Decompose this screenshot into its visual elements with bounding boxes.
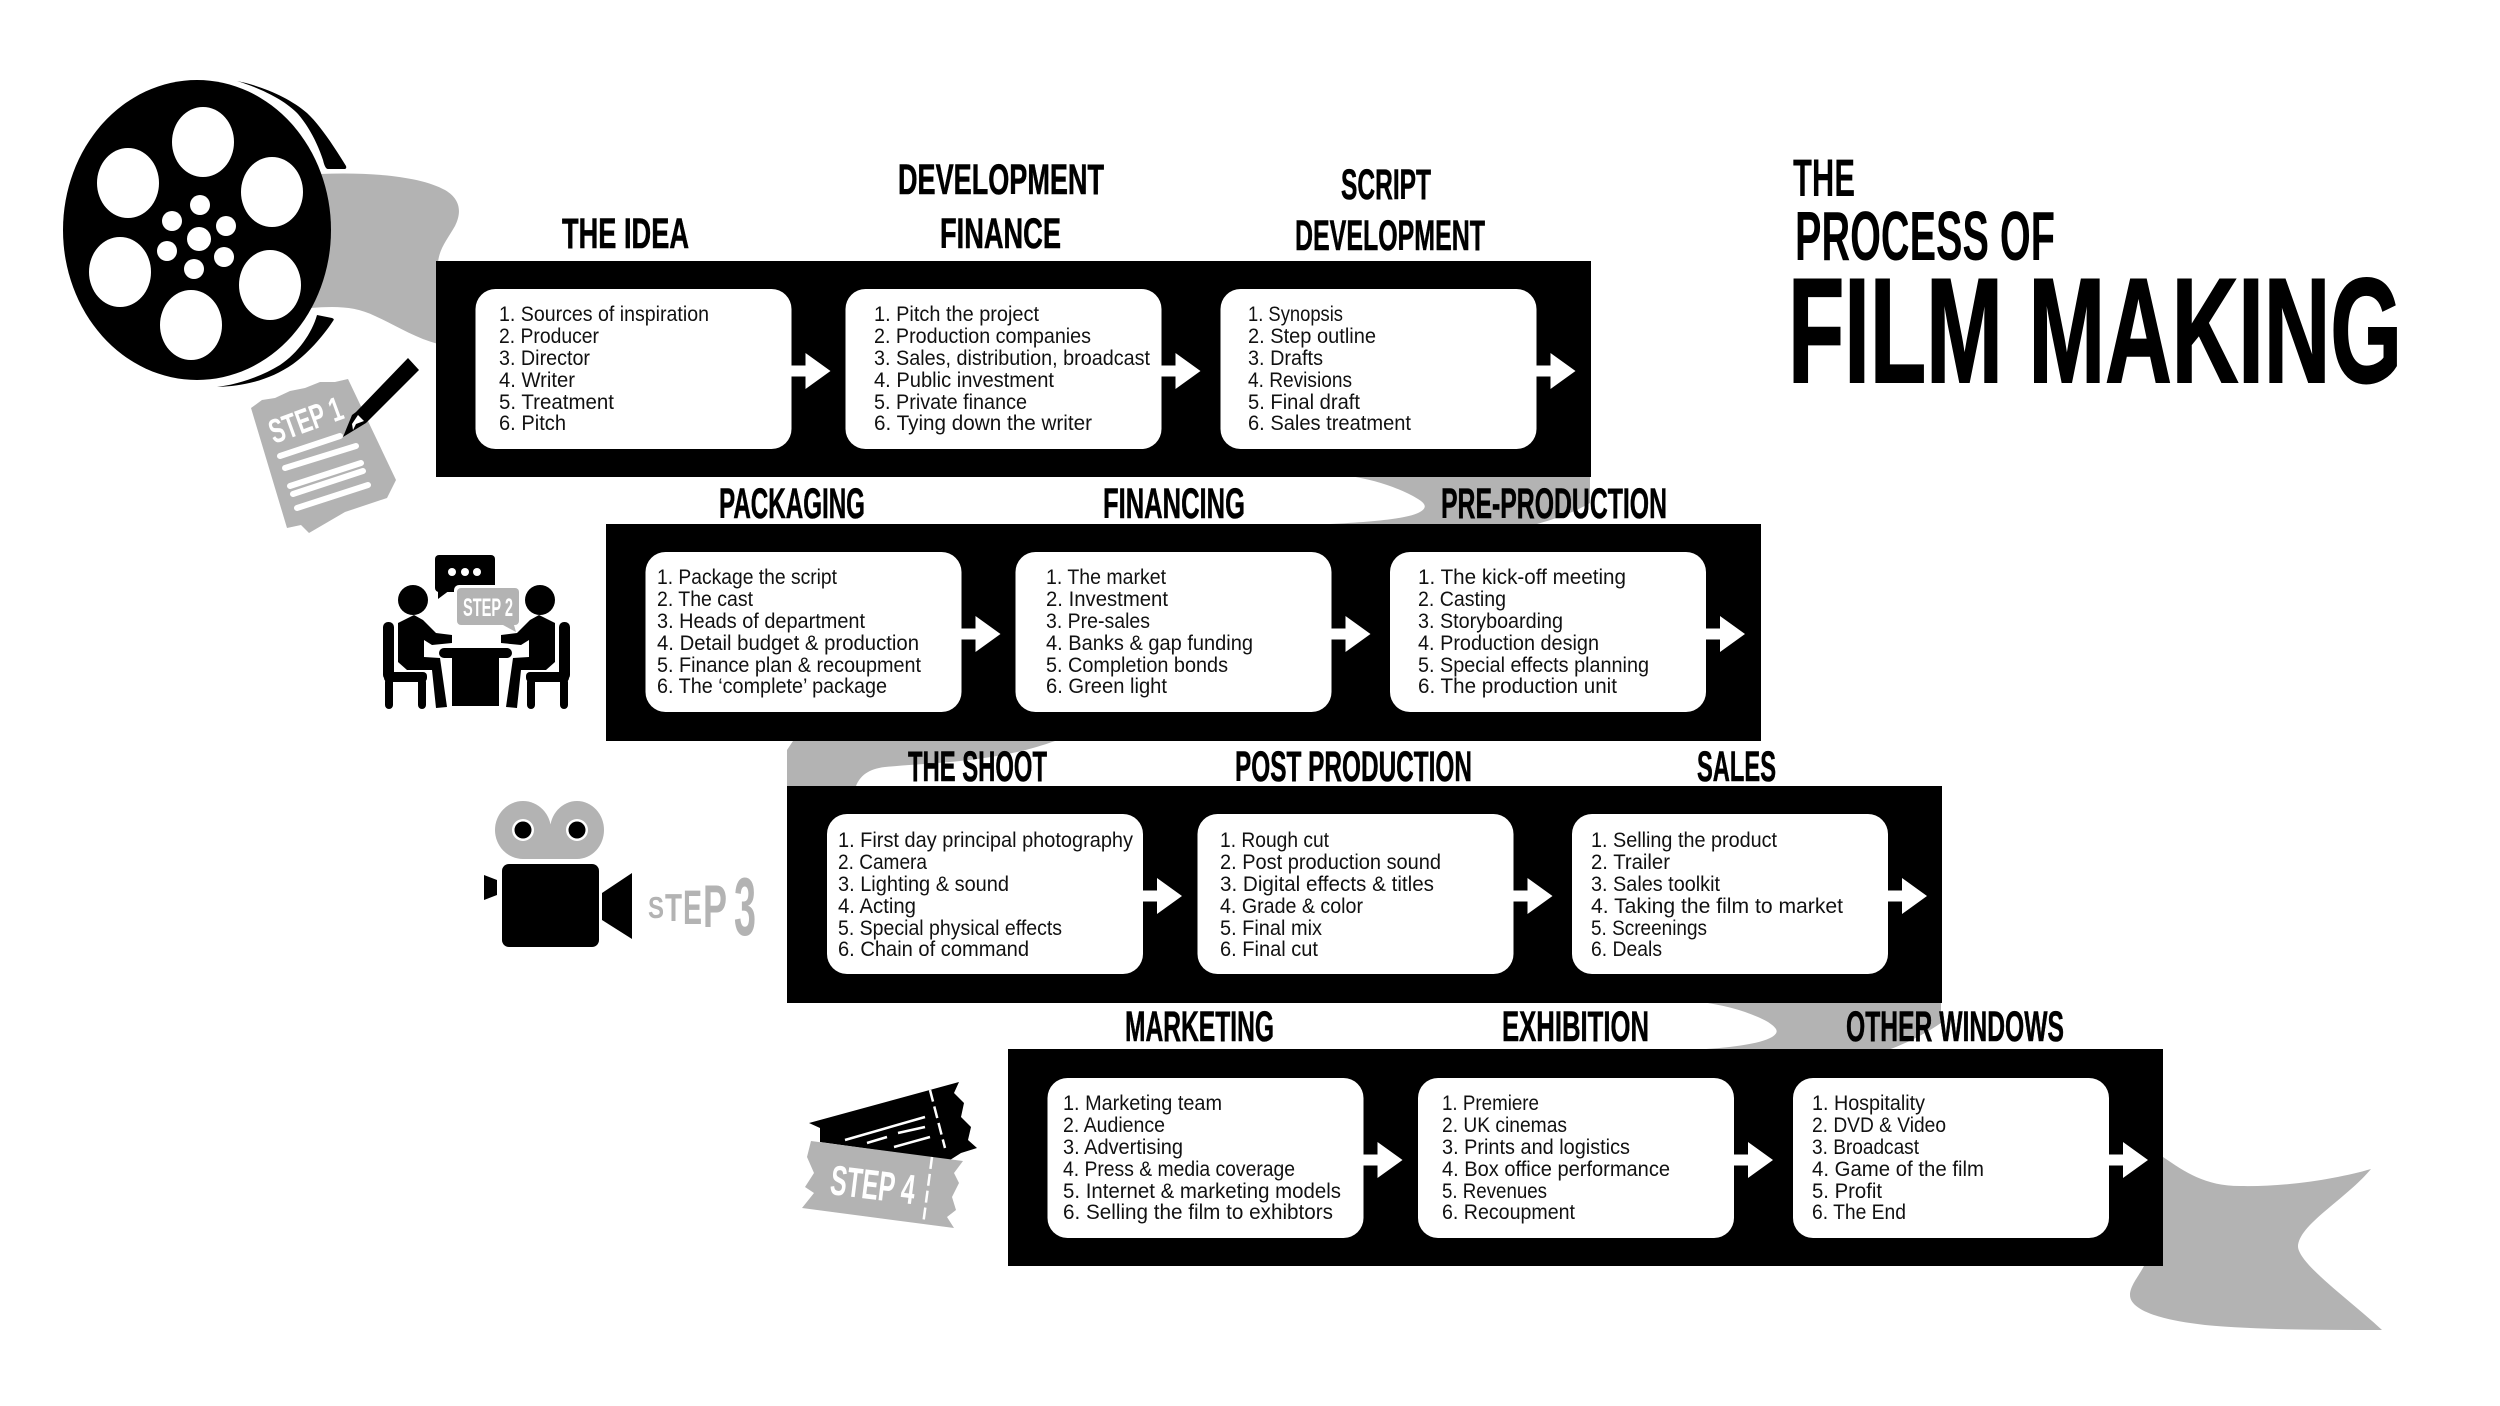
card: the idea list: 4. Writer bbox=[499, 369, 575, 392]
card: marketing list bbox=[1048, 1078, 1364, 1238]
card: other windows list: 4. Game of the film bbox=[1812, 1158, 1984, 1181]
step 3 label: E bbox=[683, 882, 702, 935]
arrow bbox=[962, 616, 1000, 652]
card: post production list: 5. Final mix bbox=[1220, 917, 1322, 940]
card: script development list: 1. Synopsis bbox=[1248, 303, 1343, 326]
card: sales list: 5. Screenings bbox=[1591, 917, 1707, 940]
heading: pre-production: PRE-PRODUCTION bbox=[1441, 480, 1667, 528]
heading: the idea: THE IDEA bbox=[562, 210, 689, 258]
icon: step 4 tickets bbox=[802, 1082, 977, 1228]
arrow bbox=[1364, 1142, 1402, 1178]
heading: script development bbox=[1295, 161, 1485, 260]
heading: exhibition: EXHIBITION bbox=[1502, 1003, 1649, 1051]
card: sales list: 6. Deals bbox=[1591, 938, 1662, 961]
card: other windows list bbox=[1793, 1078, 2109, 1238]
card: sales list: 4. Taking the film to market bbox=[1591, 895, 1843, 918]
card: the shoot list: 5. Special physical effects bbox=[838, 917, 1062, 940]
panel: step 1 row bbox=[436, 156, 1591, 477]
card: other windows list: 1. Hospitality bbox=[1812, 1092, 1925, 1115]
card: exhibition list: 3. Prints and logistics bbox=[1442, 1136, 1630, 1159]
card: sales list: 2. Trailer bbox=[1591, 851, 1670, 874]
arrow bbox=[1888, 878, 1927, 914]
card: development finance list: 1. Pitch the project bbox=[874, 303, 1039, 326]
heading: script development: DEVELOPMENT bbox=[1295, 212, 1485, 260]
card: script development list bbox=[1220, 289, 1536, 449]
heading: packaging: PACKAGING bbox=[719, 480, 865, 528]
title bbox=[1788, 149, 2402, 414]
card: exhibition list: 1. Premiere bbox=[1442, 1092, 1539, 1115]
card: packaging list: 1. Package the script bbox=[657, 566, 837, 589]
card: post production list bbox=[1198, 814, 1514, 974]
card: pre-production list: 2. Casting bbox=[1418, 588, 1506, 611]
card: exhibition list bbox=[1418, 1078, 1734, 1238]
card: other windows list: 2. DVD & Video bbox=[1812, 1114, 1946, 1137]
title: PROCESS OF bbox=[1795, 197, 2055, 275]
arrow bbox=[1162, 353, 1200, 389]
card: other windows list: 6. The End bbox=[1812, 1201, 1906, 1224]
card: pre-production list bbox=[1390, 552, 1706, 712]
card: the idea list: 6. Pitch bbox=[499, 412, 566, 435]
card: financing list: 3. Pre-sales bbox=[1046, 610, 1150, 633]
card: pre-production list: 3. Storyboarding bbox=[1418, 610, 1563, 633]
card: the idea list: 2. Producer bbox=[499, 325, 599, 348]
arrow bbox=[1514, 878, 1552, 914]
step 3 label: S bbox=[648, 890, 664, 925]
card: pre-production list: 1. The kick-off meeting bbox=[1418, 566, 1626, 589]
step 3 label: T bbox=[665, 887, 682, 930]
title: THE bbox=[1793, 149, 1855, 208]
film ribbon: ending tail bbox=[2130, 1155, 2382, 1330]
card: development finance list: 6. Tying down the writer bbox=[874, 412, 1092, 435]
card: marketing list: 3. Advertising bbox=[1063, 1136, 1183, 1159]
icon: step 1 script and pencil bbox=[251, 358, 419, 533]
card: script development list: 3. Drafts bbox=[1248, 347, 1323, 370]
card: the shoot list: 4. Acting bbox=[838, 895, 916, 918]
icon: step 1 script and pencil: STEP 1 bbox=[264, 390, 348, 452]
card: pre-production list: 6. The production unit bbox=[1418, 675, 1617, 698]
card: marketing list: 6. Selling the film to exhibtors bbox=[1063, 1201, 1333, 1224]
card: financing list: 6. Green light bbox=[1046, 675, 1167, 698]
arrow bbox=[1143, 878, 1182, 914]
card: packaging list: 6. The ‘complete’ package bbox=[657, 675, 887, 698]
step 3 label: P bbox=[703, 873, 727, 940]
card: other windows list: 5. Profit bbox=[1812, 1180, 1882, 1203]
card: pre-production list: 4. Production design bbox=[1418, 632, 1599, 655]
heading: financing: FINANCING bbox=[1103, 480, 1245, 528]
heading: sales: SALES bbox=[1697, 743, 1776, 791]
card: development finance list: 3. Sales, distribution, broadcast bbox=[874, 347, 1150, 370]
card: post production list: 3. Digital effects & titles bbox=[1220, 873, 1434, 896]
film ribbon: step 2 to step 3 bbox=[787, 741, 1055, 786]
arrow bbox=[792, 353, 830, 389]
card: exhibition list: 6. Recoupment bbox=[1442, 1201, 1575, 1224]
card: development finance list: 2. Production companies bbox=[874, 325, 1091, 348]
card: the idea list: 5. Treatment bbox=[499, 391, 614, 414]
card: script development list: 5. Final draft bbox=[1248, 391, 1360, 414]
heading: development finance bbox=[898, 156, 1104, 258]
film ribbon: step 1 to step 2 bbox=[1330, 476, 1590, 524]
heading: the shoot: THE SHOOT bbox=[908, 743, 1047, 791]
heading: post production: POST PRODUCTION bbox=[1235, 743, 1472, 791]
card: development finance list bbox=[846, 289, 1162, 449]
card: marketing list: 5. Internet & marketing models bbox=[1063, 1180, 1341, 1203]
card: script development list: 4. Revisions bbox=[1248, 369, 1352, 392]
card: sales list: 3. Sales toolkit bbox=[1591, 873, 1720, 896]
arrow bbox=[1706, 616, 1745, 652]
card: the idea list: 1. Sources of inspiration bbox=[499, 303, 709, 326]
card: the shoot list: 2. Camera bbox=[838, 851, 927, 874]
arrow bbox=[1734, 1142, 1773, 1178]
card: pre-production list: 5. Special effects planning bbox=[1418, 654, 1649, 677]
card: the idea list bbox=[476, 289, 792, 449]
card: development finance list: 4. Public investment bbox=[874, 369, 1054, 392]
card: the idea list: 3. Director bbox=[499, 347, 590, 370]
icon: film reel bbox=[63, 80, 346, 387]
film ribbon: step 3 to step 4 bbox=[1690, 1002, 1941, 1050]
film ribbon: reel to step 1 bbox=[310, 174, 459, 344]
card: financing list: 2. Investment bbox=[1046, 588, 1168, 611]
card: packaging list: 5. Finance plan & recoupment bbox=[657, 654, 921, 677]
card: packaging list: 3. Heads of department bbox=[657, 610, 865, 633]
step 3 label bbox=[648, 860, 756, 953]
heading: script development: SCRIPT bbox=[1341, 161, 1431, 209]
card: the shoot list: 1. First day principal photography bbox=[838, 829, 1133, 852]
card: sales list bbox=[1572, 814, 1888, 974]
card: other windows list: 3. Broadcast bbox=[1812, 1136, 1919, 1159]
card: post production list: 2. Post production sound bbox=[1220, 851, 1441, 874]
card: exhibition list: 2. UK cinemas bbox=[1442, 1114, 1567, 1137]
card: the shoot list: 6. Chain of command bbox=[838, 938, 1029, 961]
card: financing list: 5. Completion bonds bbox=[1046, 654, 1228, 677]
card: the shoot list: 3. Lighting & sound bbox=[838, 873, 1009, 896]
arrow bbox=[2109, 1142, 2148, 1178]
card: packaging list: 4. Detail budget & production bbox=[657, 632, 919, 655]
icon: step 2 meeting: STEP 2 bbox=[463, 594, 513, 622]
card: marketing list: 4. Press & media coverage bbox=[1063, 1158, 1295, 1181]
card: development finance list: 5. Private finance bbox=[874, 391, 1027, 414]
card: the shoot list bbox=[827, 814, 1143, 974]
heading: other windows: OTHER WINDOWS bbox=[1846, 1003, 2064, 1051]
panel: step 4 row bbox=[1008, 1003, 2163, 1266]
panel: step 2 row bbox=[606, 480, 1761, 741]
arrow bbox=[1332, 616, 1370, 652]
icon: step 2 meeting bbox=[383, 555, 570, 709]
text: 3 bbox=[734, 860, 756, 953]
heading: marketing: MARKETING bbox=[1125, 1003, 1274, 1051]
card: script development list: 2. Step outline bbox=[1248, 325, 1376, 348]
card: script development list: 6. Sales treatment bbox=[1248, 412, 1411, 435]
card: exhibition list: 4. Box office performance bbox=[1442, 1158, 1670, 1181]
card: financing list: 4. Banks & gap funding bbox=[1046, 632, 1253, 655]
heading: development finance: FINANCE bbox=[940, 210, 1061, 258]
card: sales list: 1. Selling the product bbox=[1591, 829, 1777, 852]
card: packaging list: 2. The cast bbox=[657, 588, 753, 611]
heading: development finance: DEVELOPMENT bbox=[898, 156, 1104, 204]
icon: step 4 tickets: STEP 4 bbox=[828, 1156, 918, 1213]
card: post production list: 4. Grade & color bbox=[1220, 895, 1363, 918]
arrow bbox=[1536, 353, 1576, 389]
card: financing list bbox=[1016, 552, 1332, 712]
card: exhibition list: 5. Revenues bbox=[1442, 1180, 1547, 1203]
card: marketing list: 1. Marketing team bbox=[1063, 1092, 1222, 1115]
card: financing list: 1. The market bbox=[1046, 566, 1166, 589]
icon: step 3 camera bbox=[484, 801, 756, 953]
card: post production list: 6. Final cut bbox=[1220, 938, 1318, 961]
card: packaging list bbox=[646, 552, 962, 712]
panel: step 3 row bbox=[787, 743, 1942, 1003]
card: post production list: 1. Rough cut bbox=[1220, 829, 1329, 852]
card: marketing list: 2. Audience bbox=[1063, 1114, 1165, 1137]
